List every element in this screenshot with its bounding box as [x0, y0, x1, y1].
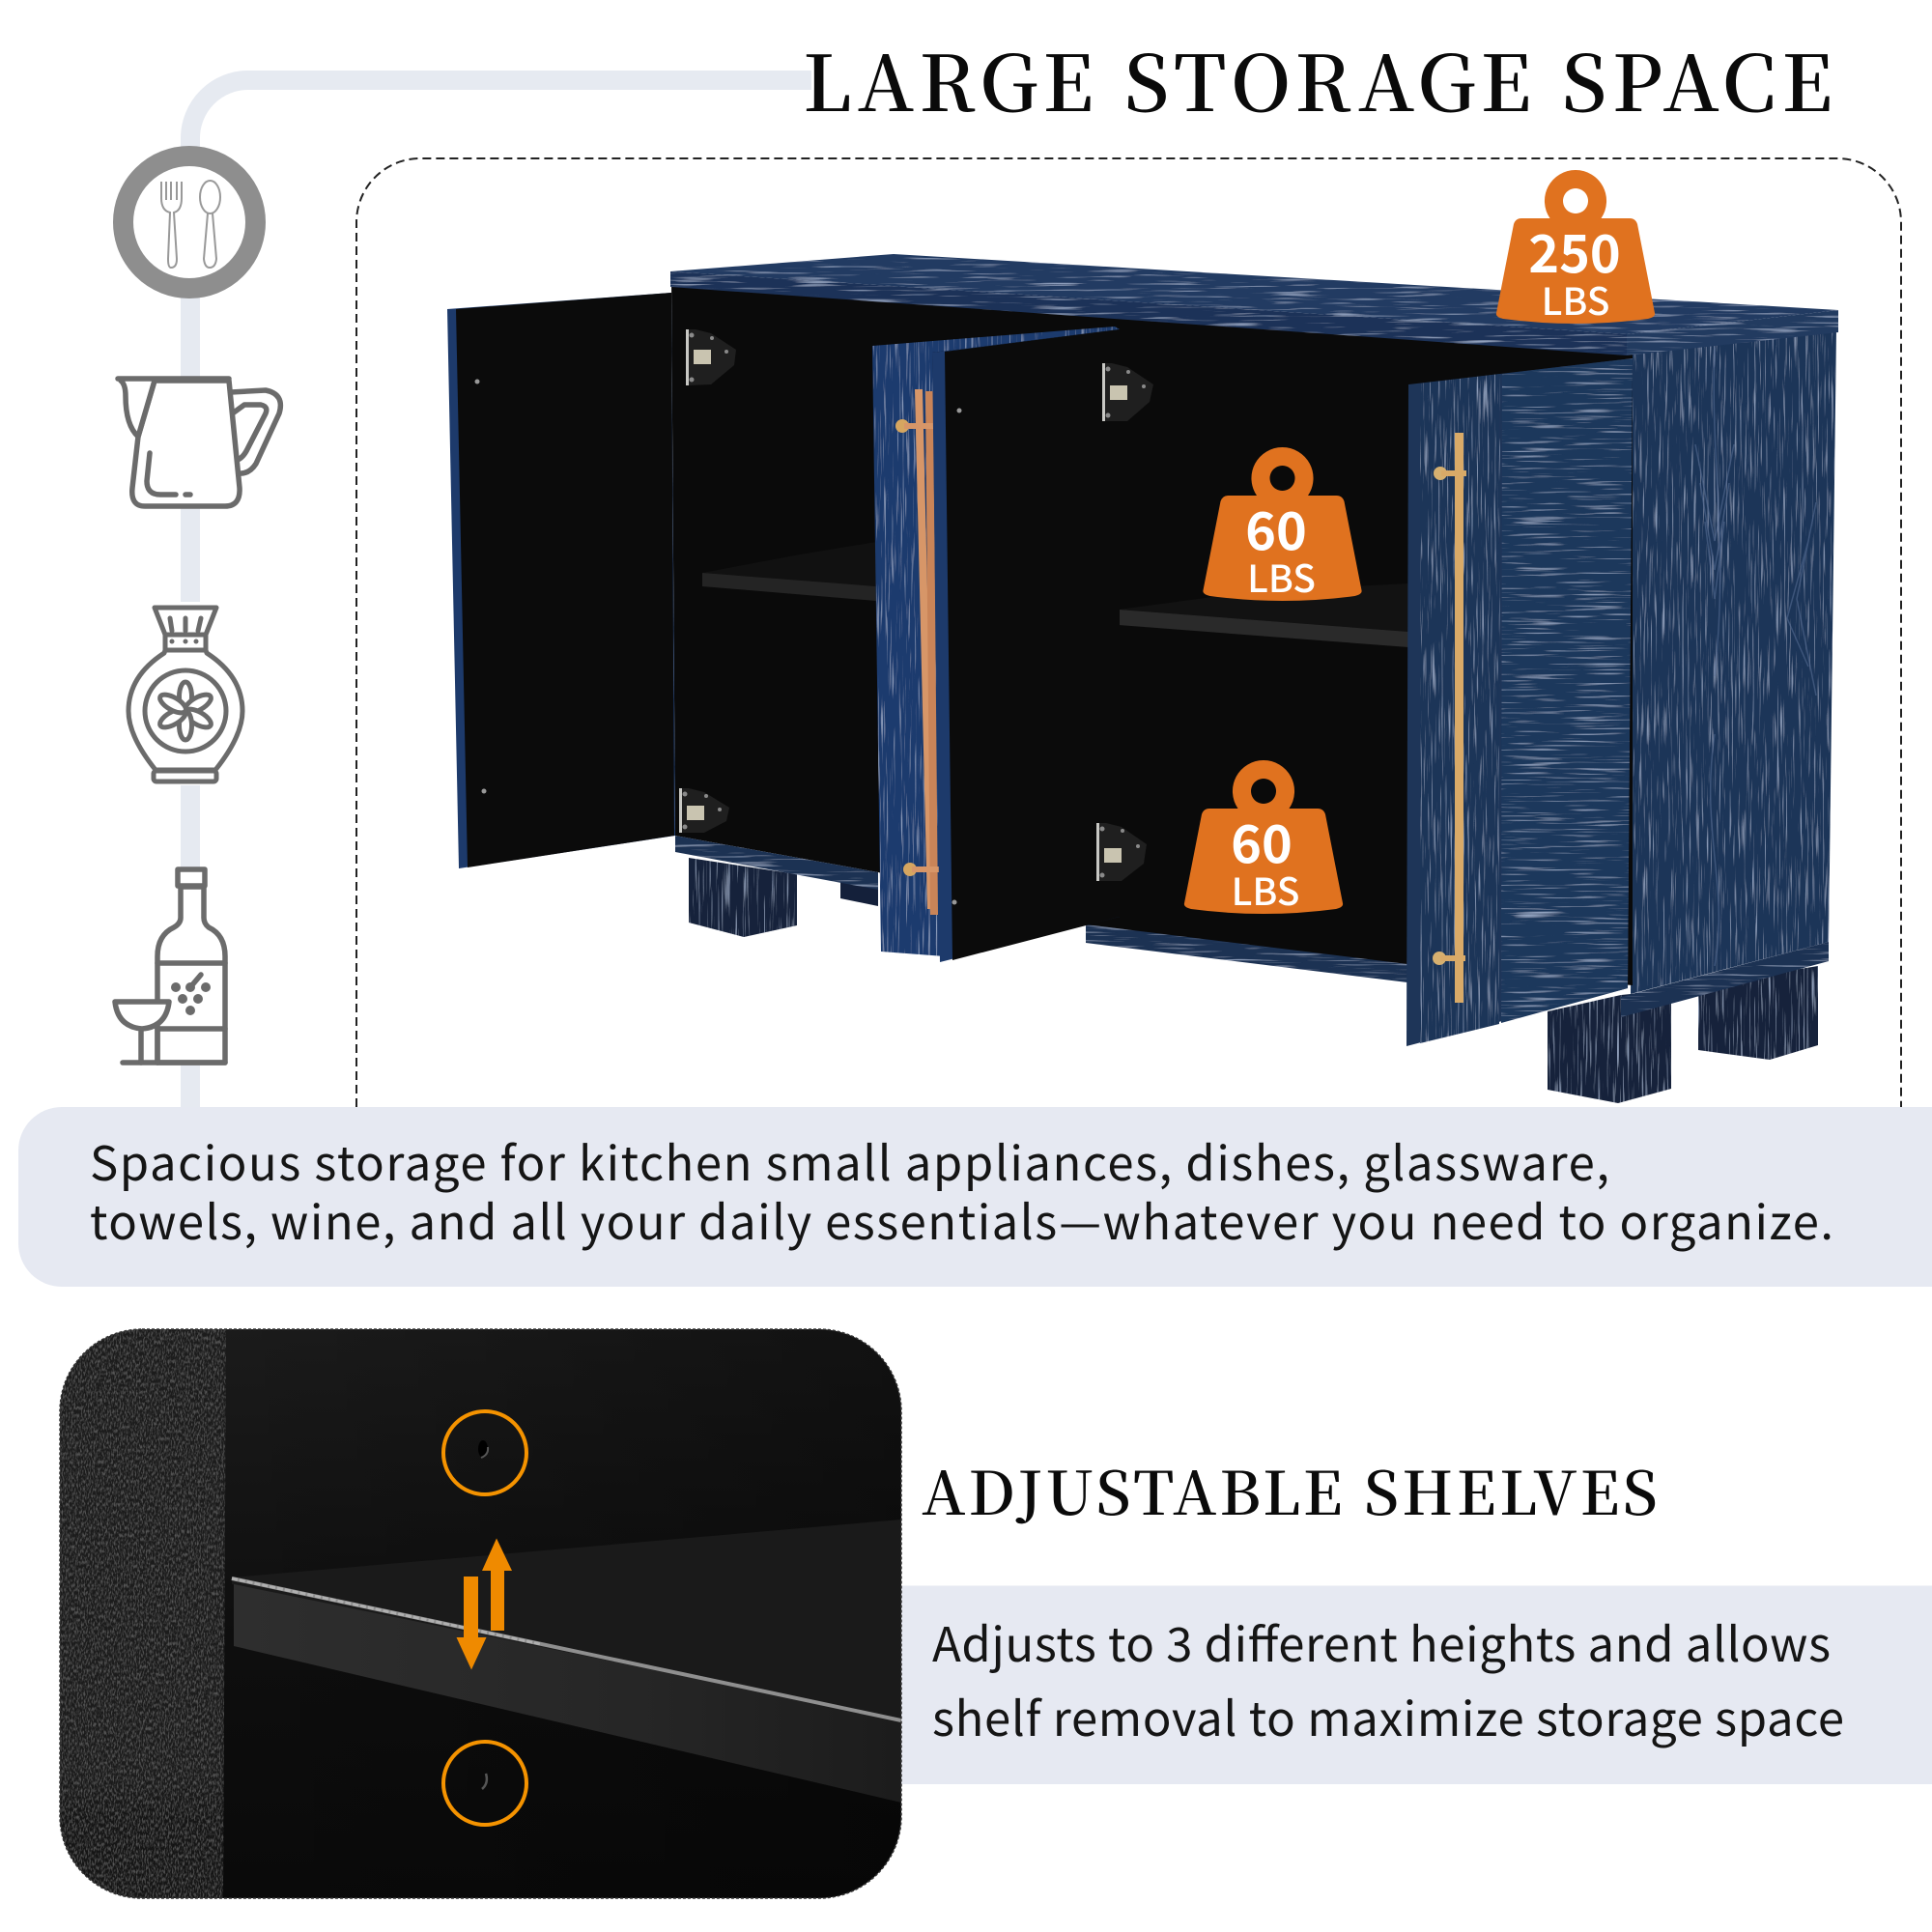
cabinet interior [671, 280, 1633, 985]
cabinet legs [689, 858, 1818, 1103]
weight badge: lower shelf 60 lbs: LBS [1232, 863, 1299, 917]
gold handle [1433, 433, 1466, 1003]
centre door front [872, 327, 1120, 956]
lower plinth [675, 836, 1407, 982]
icon: wine bottle and glass [115, 869, 225, 1063]
shelf band [900, 1586, 1932, 1784]
grain lines on side panel [1695, 348, 1816, 966]
weight badge: 250 lbs: 250 [1528, 212, 1621, 288]
right shelf [1119, 583, 1408, 647]
right door [1406, 358, 1633, 1046]
shelf band: shelf removal to maximize storage space [932, 1682, 1844, 1750]
shelf close-up photo [60, 1329, 901, 1898]
description band: Spacious storage for kitchen small appliances, dishes, glassware, [90, 1126, 1609, 1195]
left shelf [702, 542, 876, 601]
arrow: up [482, 1538, 512, 1631]
weight badge: upper shelf 60 lbs: LBS [1247, 550, 1316, 604]
right side panel [1631, 328, 1836, 994]
right side plinth band [1621, 942, 1829, 1017]
dashed photo border [60, 1329, 901, 1898]
callout circle: upper hole [443, 1411, 526, 1494]
weight badge: lower shelf 60 lbs: 60 [1231, 802, 1293, 878]
sideboard photo [447, 254, 1838, 1103]
weight badge: 250 lbs [1496, 170, 1655, 327]
left open door [447, 293, 675, 868]
weight badge: 250 lbs: LBS [1542, 272, 1609, 327]
weight badge: lower shelf 60 lbs [1184, 760, 1343, 917]
top panel [670, 254, 1838, 355]
title: LARGE STORAGE SPACE [803, 22, 1833, 133]
centre open door [932, 329, 1120, 962]
icon: cutlery plate [124, 156, 255, 288]
icon: pitcher [118, 379, 280, 506]
shelf band: Adjusts to 3 different heights and allows [932, 1607, 1831, 1676]
rose gold handle [895, 389, 941, 915]
dashed product frame [356, 158, 1901, 1107]
weight badge: upper shelf 60 lbs: 60 [1245, 489, 1307, 565]
description band [18, 1107, 1932, 1287]
hinges [679, 329, 1153, 881]
weight badge: upper shelf 60 lbs [1203, 447, 1362, 604]
callout circle: lower hole [443, 1742, 526, 1825]
icon: vase [128, 602, 242, 785]
description band: towels, wine, and all your daily essentials—whatever you need to organize. [90, 1185, 1833, 1254]
heading: adjustable shelves: ADJUSTABLE SHELVES [922, 1446, 1658, 1532]
arrow: down [456, 1577, 487, 1669]
connector track [190, 80, 811, 1111]
